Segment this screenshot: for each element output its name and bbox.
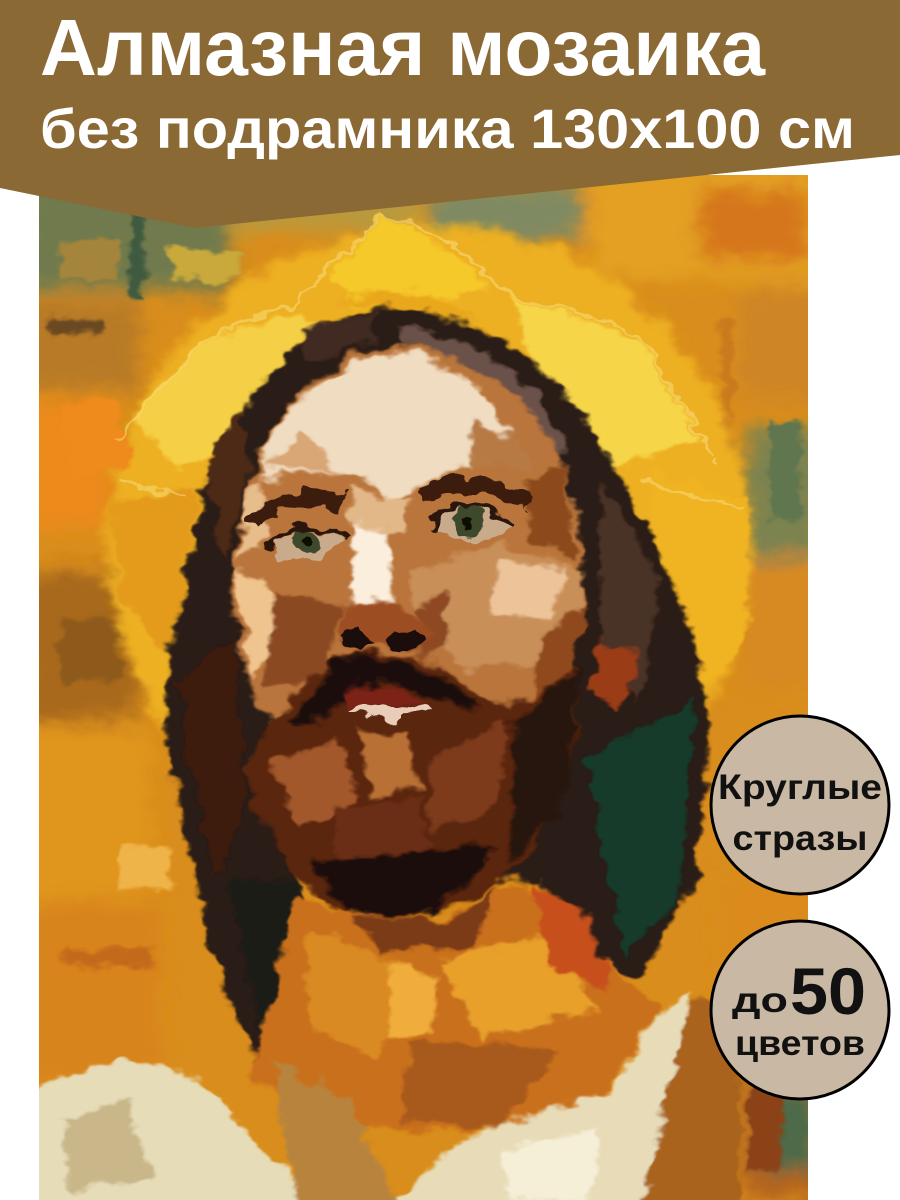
- subtitle: без подрамника 130х100 см: [40, 97, 855, 160]
- neck: [250, 880, 660, 1130]
- beard: [245, 652, 580, 917]
- badge: up to 50 colours: до: [732, 981, 788, 1020]
- badge: round rhinestones: Круглые: [718, 768, 882, 807]
- hair: [165, 308, 708, 1080]
- nose: [338, 600, 430, 652]
- badge: up to 50 colours: цветов: [735, 1024, 865, 1063]
- face: [228, 341, 590, 724]
- painting: [39, 175, 808, 1200]
- badge: up to 50 colours: 50: [790, 954, 866, 1028]
- badge: round rhinestones: стразы: [732, 819, 868, 858]
- halo: [61, 212, 760, 738]
- painted background: [20, 160, 830, 1200]
- badge: up to 50 colours: [711, 921, 889, 1099]
- title: Алмазная мозаика: [40, 3, 765, 92]
- robe: [20, 990, 740, 1200]
- banner: [0, 0, 900, 228]
- eyes and brows: [245, 474, 535, 563]
- badge: round rhinestones: [711, 716, 889, 894]
